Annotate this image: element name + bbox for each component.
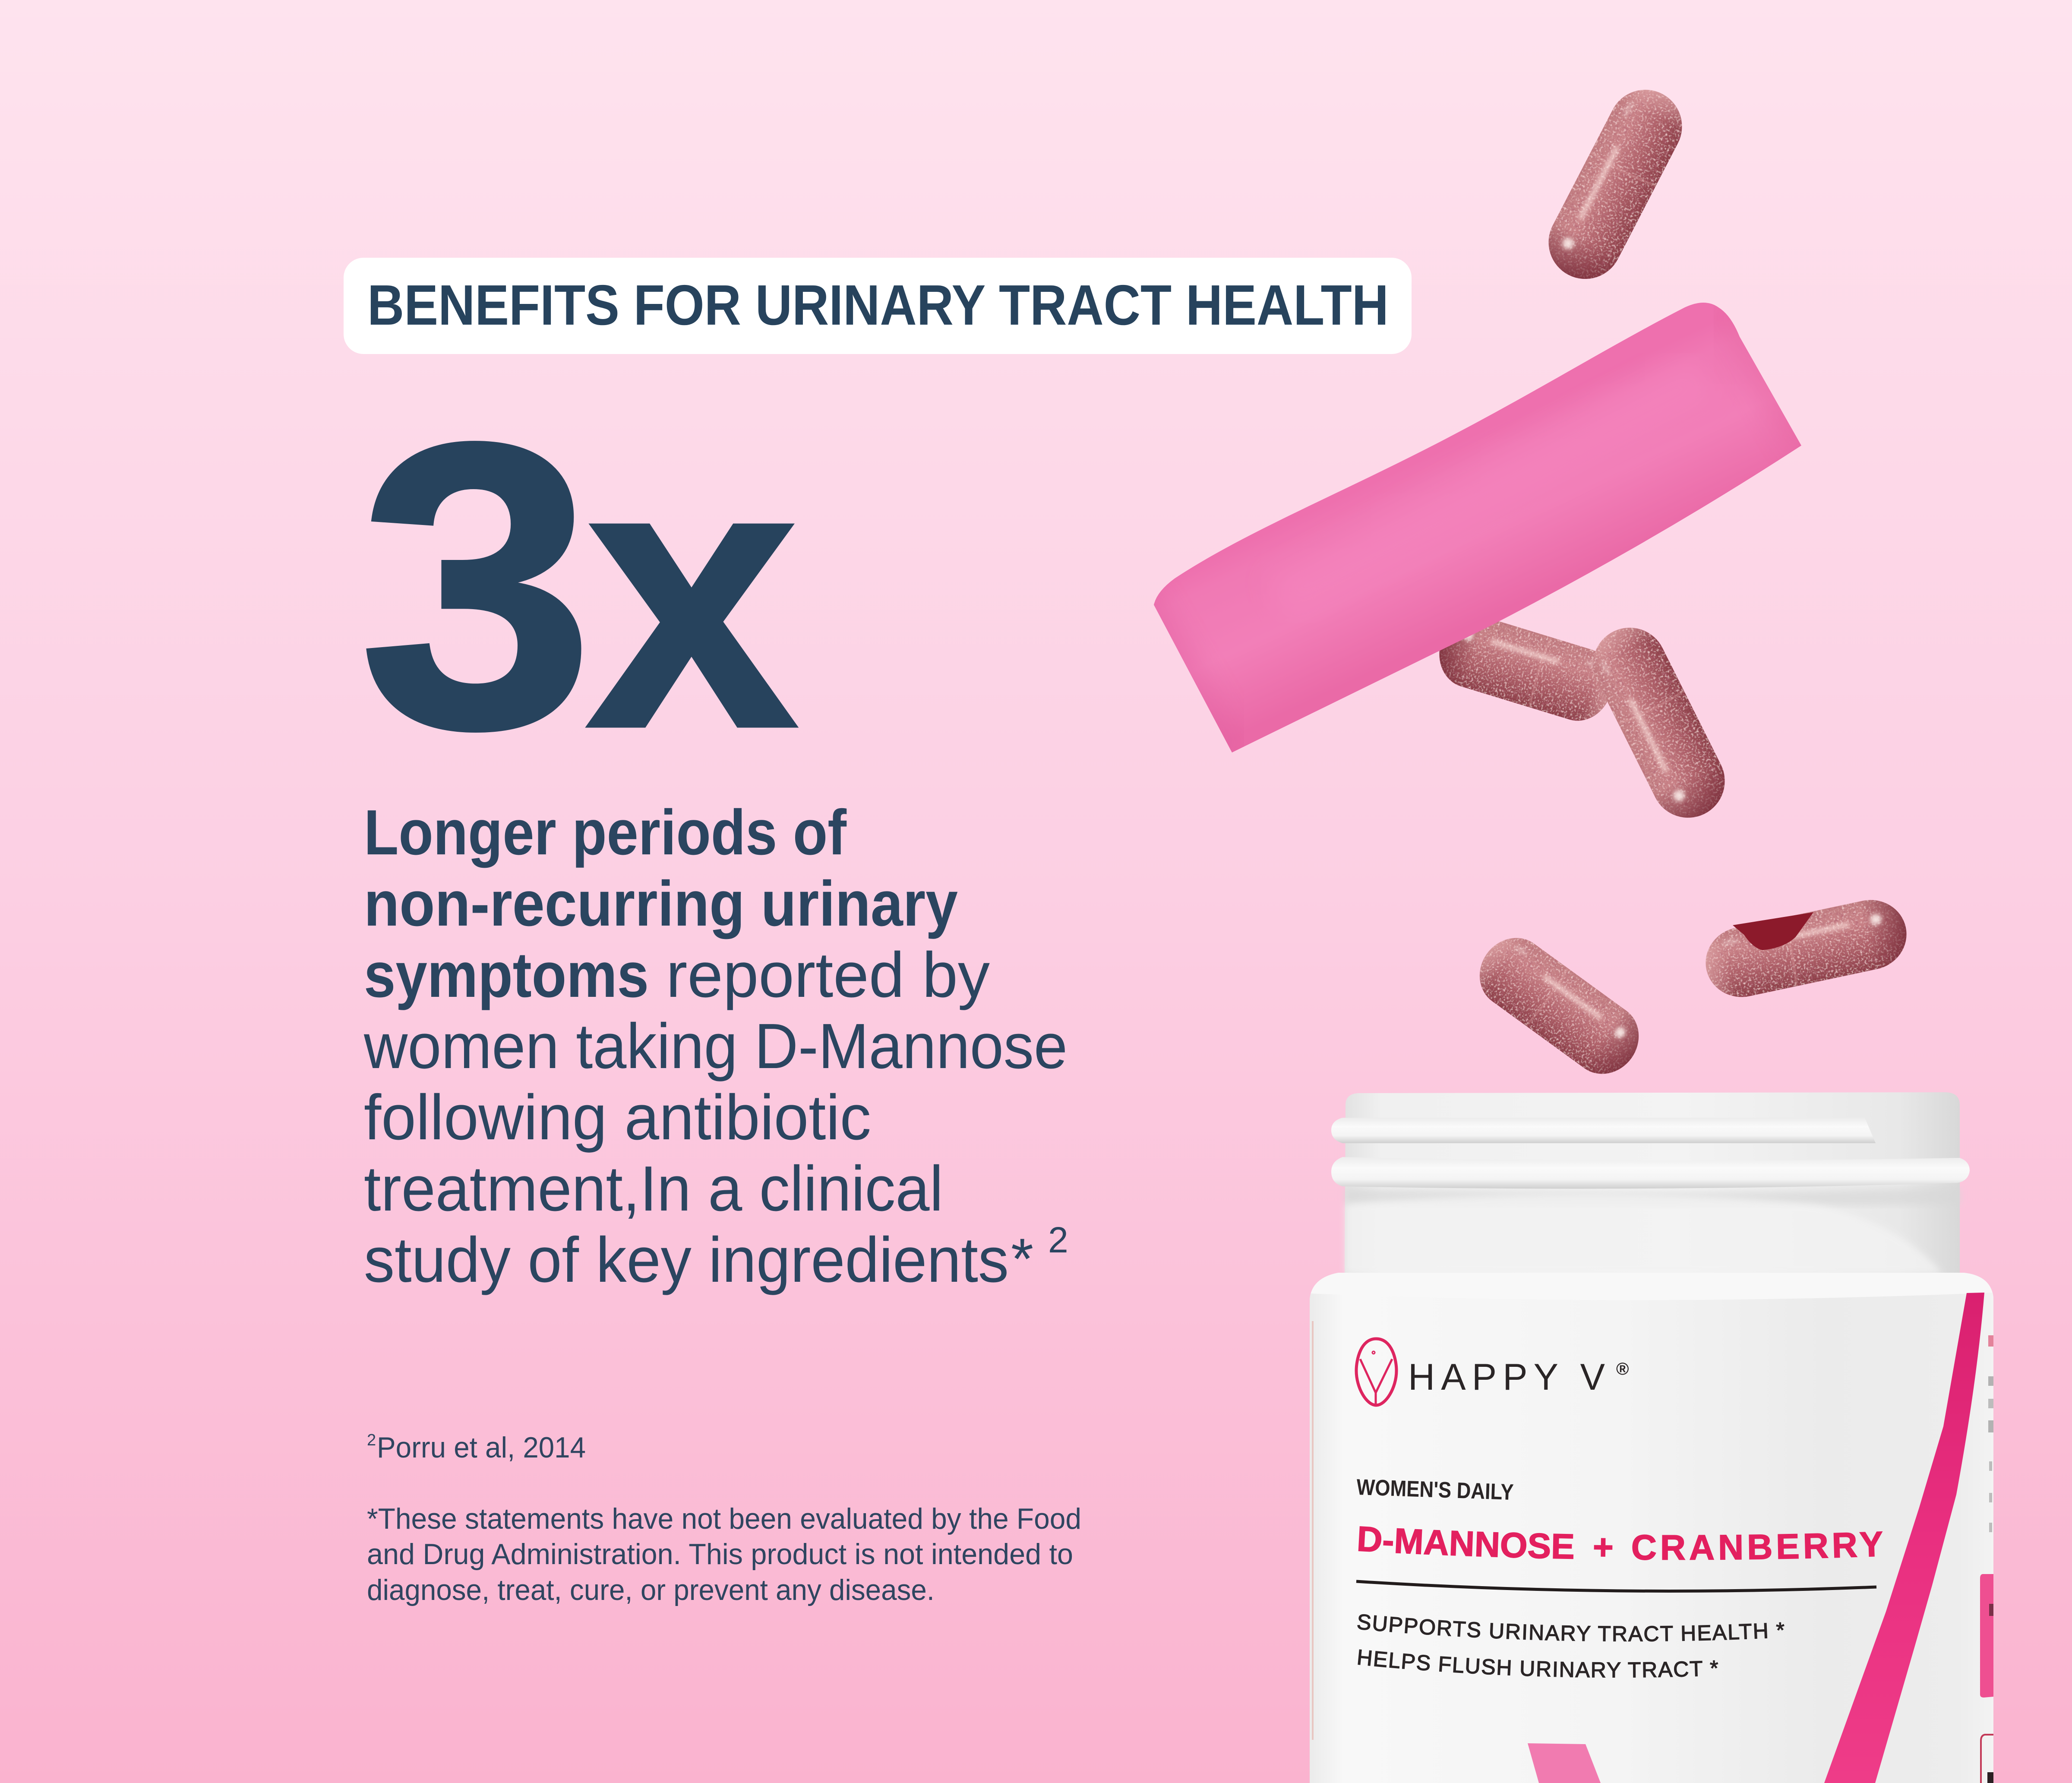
main statement: study of key ingredients — [364, 1224, 1009, 1296]
FDA disclaimer: diagnose, treat, cure, or prevent any disease. — [367, 1574, 935, 1606]
main statement: reported by — [666, 939, 990, 1011]
main statement: symptoms — [364, 939, 649, 1011]
neck thread upper — [1331, 1118, 1876, 1143]
womens daily: WOMEN'S DAILY — [1356, 1475, 1514, 1505]
FDA disclaimer: *These statements have not been evaluated by the Food — [367, 1502, 1081, 1535]
citation: 2 — [367, 1431, 376, 1449]
capsule window — [1733, 912, 1813, 950]
product name: + — [1592, 1527, 1614, 1567]
bottle neck — [1345, 1092, 1960, 1278]
capsule: falling left — [1466, 925, 1652, 1087]
main statement: treatment,In a clinical — [364, 1153, 943, 1224]
logo mark — [1356, 1339, 1396, 1405]
main statement — [363, 797, 1068, 1296]
neck thread lower — [1331, 1157, 1970, 1189]
big number 3x: 3 — [359, 359, 594, 812]
registered mark: ® — [1616, 1359, 1629, 1378]
big number 3x: x — [586, 383, 800, 806]
pink side panel — [1980, 1574, 1993, 1698]
bottle body — [1310, 1273, 1993, 1783]
capsule: top — [1536, 77, 1695, 292]
title text: BENEFITS FOR URINARY TRACT HEALTH — [367, 273, 1389, 337]
bottle — [1310, 1092, 1993, 1783]
brand name: HAPPY V — [1408, 1356, 1605, 1398]
label panel — [1310, 1293, 1993, 1783]
main statement: 2 — [1048, 1220, 1068, 1260]
main statement: women taking D-Mannose — [363, 1011, 1068, 1082]
citation: Porru et al, 2014 — [377, 1431, 586, 1464]
capsule: right of lid — [1580, 615, 1737, 830]
product name: CRANBERRY — [1631, 1524, 1887, 1568]
pink swoosh band — [1824, 1293, 1984, 1783]
main statement: Longer periods of — [364, 797, 847, 868]
capsule: open with dark window — [1699, 893, 1913, 1004]
main statement: following antibiotic — [364, 1082, 871, 1153]
right edge label marks — [1988, 1335, 1993, 1532]
main statement: non-recurring urinary — [364, 868, 958, 939]
pink V shape — [1528, 1743, 1601, 1783]
FDA disclaimer: and Drug Administration. This product is not intended to — [367, 1538, 1073, 1571]
benefit line one: SUPPORTS URINARY TRACT HEALTH * — [1356, 1609, 1786, 1646]
FDA disclaimer — [367, 1502, 1081, 1606]
capsule: behind lid — [1431, 607, 1621, 729]
benefit line two: HELPS FLUSH URINARY TRACT * — [1356, 1645, 1720, 1682]
main statement: * — [1011, 1227, 1033, 1291]
product name — [1356, 1519, 1887, 1568]
lid — [1140, 302, 1809, 760]
label divider — [1356, 1581, 1876, 1591]
big number 3x — [359, 359, 800, 812]
product name: D-MANNOSE — [1356, 1519, 1575, 1567]
title pill — [344, 258, 1412, 354]
